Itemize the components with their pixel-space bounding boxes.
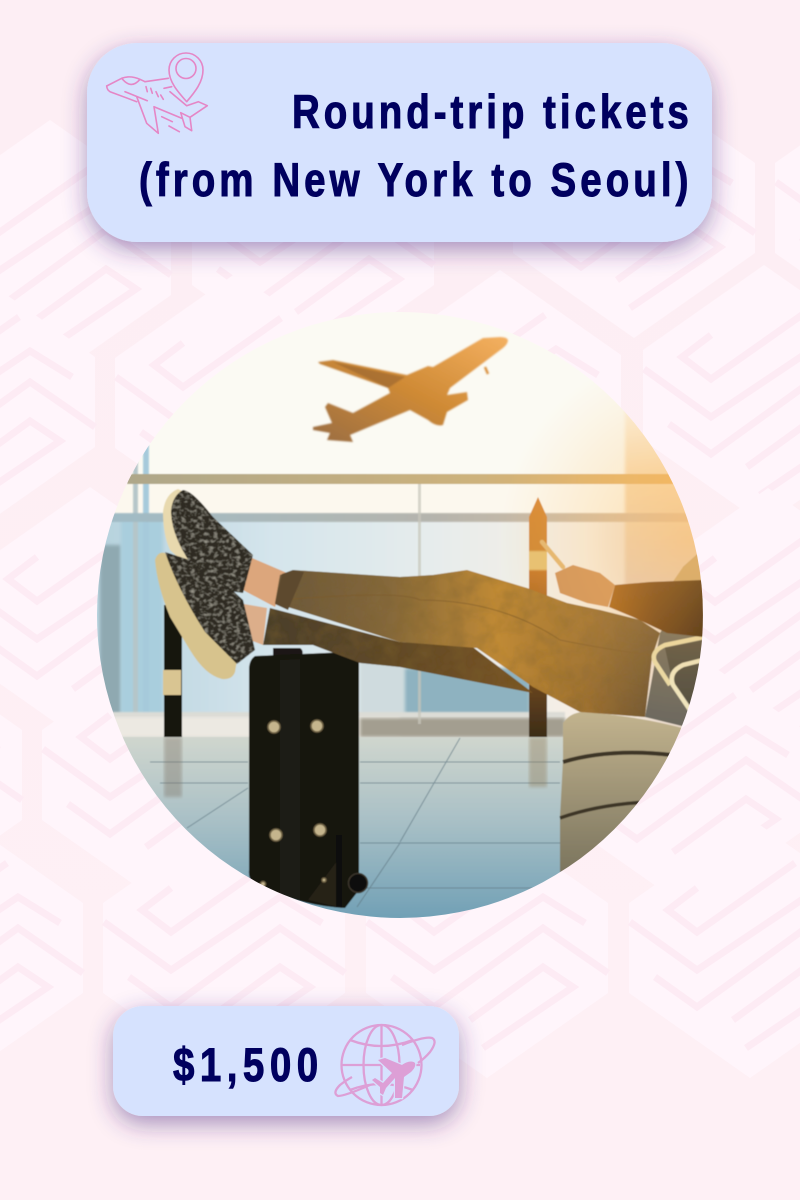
leg seam bbox=[304, 595, 588, 646]
upper leg bbox=[275, 570, 660, 717]
lower leg bbox=[263, 608, 533, 693]
phone bbox=[542, 542, 563, 567]
sleeve bbox=[609, 580, 703, 637]
lower ankle bbox=[243, 604, 268, 646]
black post with tag bbox=[163, 605, 182, 737]
suitcase studs bbox=[260, 720, 326, 886]
lower shoe bbox=[155, 552, 255, 679]
sky and window background bbox=[90, 305, 710, 740]
circular airport photo illustration bbox=[90, 305, 710, 925]
floor tiles bbox=[123, 736, 564, 918]
armrests bbox=[654, 637, 704, 710]
warm sunlight glow bbox=[527, 398, 703, 709]
infographic canvas bbox=[66, 33, 733, 1140]
seat cushion bbox=[559, 711, 682, 872]
icon: globe with airplane bbox=[335, 1025, 435, 1105]
suitcase bbox=[249, 648, 368, 908]
title text line 1: Round-trip tickets bbox=[292, 86, 689, 139]
hand bbox=[555, 565, 615, 607]
upper ankle bbox=[243, 558, 287, 607]
title panel bbox=[87, 43, 712, 242]
airplane in the sky bbox=[313, 337, 508, 442]
title text line 2: (from New York to Seoul) bbox=[139, 154, 688, 207]
icon: airplane and location pin bbox=[107, 53, 207, 133]
jacket shoulder highlight bbox=[674, 554, 701, 582]
trouser cuff bbox=[275, 570, 304, 610]
price panel bbox=[113, 1006, 459, 1116]
gap between armrests bbox=[665, 640, 704, 705]
price value: $1,500 bbox=[173, 1039, 318, 1092]
orange post bbox=[529, 497, 547, 737]
denim jacket bbox=[644, 594, 703, 726]
window rails bbox=[100, 474, 710, 724]
upper shoe bbox=[163, 489, 253, 593]
